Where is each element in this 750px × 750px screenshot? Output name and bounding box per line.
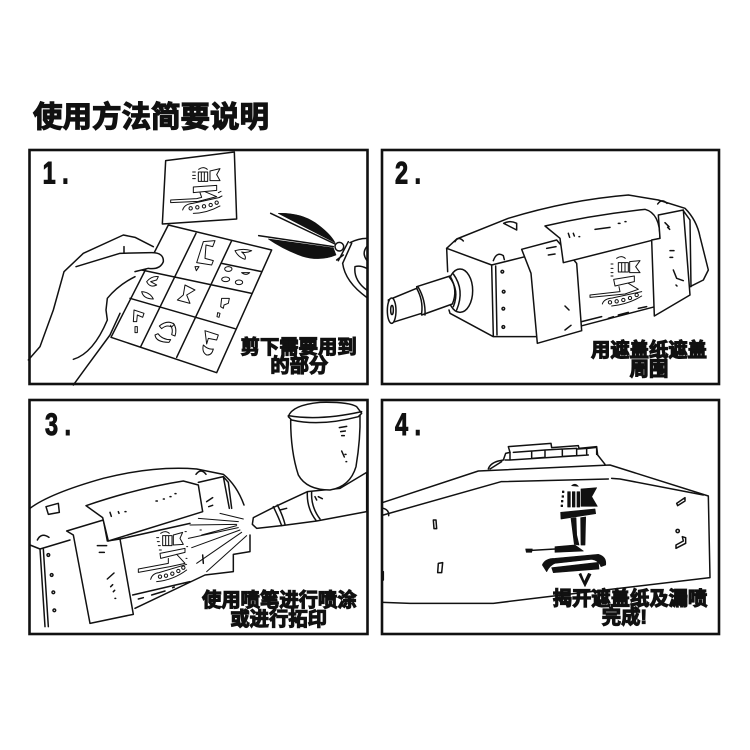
- icon: turret side view: [383, 443, 710, 603]
- caption step 4: 揭开遮盖纸及漏喷: [553, 587, 708, 610]
- panel: step 3: [30, 400, 368, 634]
- thumb over the sheet: [76, 253, 163, 277]
- solid stencil mark: [526, 484, 606, 587]
- icon: stencil sheet: [162, 152, 237, 224]
- icon: turret body: [447, 195, 708, 337]
- step number 4: .: [414, 407, 421, 442]
- caption step 2: 用遮盖纸遮盖: [591, 339, 707, 362]
- step number 2: .: [414, 155, 421, 190]
- icon: scissors: [259, 213, 367, 297]
- icon: airbrush: [252, 402, 367, 528]
- title: 使用方法简要说明: [33, 101, 269, 134]
- icon: gun barrel: [387, 269, 473, 323]
- panel: step 1: [28, 150, 367, 385]
- step number 3: 3: [45, 407, 58, 442]
- icon: turret body masked: [30, 468, 244, 627]
- masking paper pieces: [522, 209, 691, 343]
- caption step 4: 完成!: [602, 606, 647, 629]
- step number 1: .: [62, 155, 69, 190]
- stencil on turret: [590, 257, 642, 306]
- masking paper pieces: [67, 481, 250, 623]
- caption step 1: 的部分: [270, 354, 328, 377]
- step number 4: 4: [395, 407, 408, 442]
- stencil grid sheet: [111, 225, 272, 373]
- spray lines: [185, 513, 247, 572]
- panel: step 4: [382, 400, 719, 634]
- caption step 2: 周围: [630, 359, 668, 380]
- caption step 3: 或进行拓印: [230, 607, 327, 630]
- step number 3: .: [64, 407, 71, 442]
- panel: step 2: [382, 150, 719, 384]
- step number 1: 1: [43, 155, 56, 190]
- caption step 3: 使用喷笔进行喷涂: [202, 589, 357, 612]
- stencil on turret: [138, 532, 187, 582]
- step number 2: 2: [395, 155, 408, 190]
- caption step 1: 剪下需要用到: [241, 336, 357, 358]
- hand behind the sheet: [28, 235, 153, 385]
